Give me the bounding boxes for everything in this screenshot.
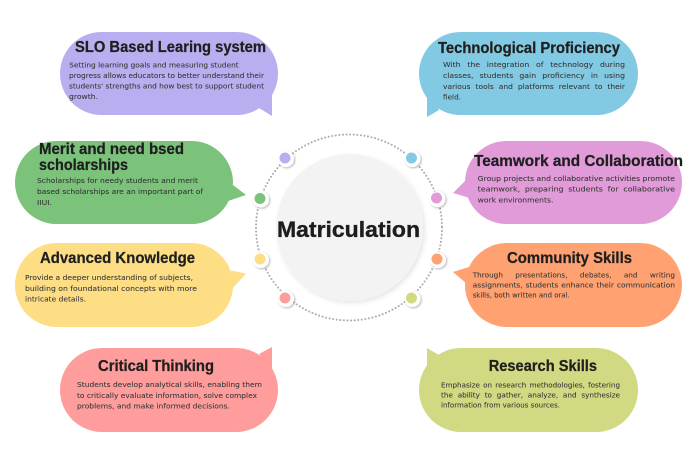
body text: Students develop analytical skills, enabling them: [77, 380, 262, 389]
speech bubble: [60, 32, 278, 116]
node: orange: [430, 252, 446, 268]
node: yellow: [253, 252, 269, 268]
heading: Teamwork and Collaboration: [474, 153, 683, 170]
body text: [472, 271, 675, 300]
body text: assignments, students enhance their communication: [473, 281, 675, 290]
body text: [478, 174, 676, 204]
speech bubble: [453, 243, 682, 327]
body text: [69, 60, 264, 101]
center title: Matriculation: [277, 217, 420, 242]
body text: Group projects and collaborative activities promote: [478, 174, 676, 183]
body text: [37, 176, 204, 207]
node: blue: [404, 151, 420, 167]
node: orchid: [430, 191, 446, 207]
body text: IIUI.: [37, 198, 52, 207]
body text: Scholarships for needy students and merit: [37, 176, 198, 185]
heading: Advanced Knowledge: [40, 250, 195, 267]
speech bubble: [15, 243, 246, 327]
body text: [77, 380, 262, 410]
panel: Merit and need bsed scholarships: [15, 141, 246, 224]
speech bubble: [15, 141, 246, 224]
heading: SLO Based Learing system: [75, 39, 266, 56]
center circle: [276, 154, 423, 301]
heading: Merit and need bsed: [39, 141, 184, 158]
heading: Critical Thinking: [98, 358, 214, 375]
panel: SLO Based Learing system: [60, 32, 278, 116]
body text: Provide a deeper understanding of subjects,: [25, 273, 193, 282]
body text: intricate details.: [25, 294, 86, 304]
body text: problems, and make informed decisions.: [77, 402, 230, 410]
body text: [25, 273, 198, 304]
body text: skills, both written and oral.: [473, 291, 570, 300]
body text: [443, 60, 625, 102]
heading: Technological Proficiency: [438, 40, 620, 57]
body text: [441, 380, 620, 409]
body text: Through presentations, debates, and writing: [472, 271, 675, 280]
panel: Advanced Knowledge: [15, 243, 246, 327]
panel: Research Skills: [419, 348, 638, 432]
body text: progress allows educators to better understand their: [69, 71, 264, 80]
speech bubble: [419, 32, 638, 117]
body text: building on foundational concepts with more: [25, 284, 198, 293]
node: green: [253, 192, 269, 208]
body text: classes, students gain proficiency in using: [443, 71, 625, 80]
body text: information from various sources.: [441, 400, 560, 409]
body text: based scholarships are an important part of: [37, 187, 203, 196]
node: lime: [404, 291, 420, 307]
body text: Emphasize on research methodologies, fostering: [441, 380, 620, 389]
body text: Setting learning goals and measuring student: [69, 60, 239, 70]
body text: various tools and platforms relevant to their: [443, 82, 625, 91]
panel: Teamwork and Collaboration: [453, 141, 683, 224]
body text: field.: [443, 92, 461, 102]
node: purple: [278, 151, 294, 167]
body text: growth.: [69, 92, 98, 101]
speech bubble: [419, 348, 638, 432]
body text: the ability to gather, analyze, and synthesize: [441, 390, 620, 399]
speech bubble: [60, 347, 278, 432]
heading: Research Skills: [489, 358, 597, 375]
heading: [39, 141, 184, 174]
body text: students' strengths and how best to support student: [69, 82, 264, 90]
node: pink: [278, 291, 294, 307]
heading: scholarships: [39, 157, 128, 174]
body text: With the integration of technology during: [443, 60, 625, 69]
panel: Technological Proficiency: [419, 32, 638, 117]
speech bubble: [453, 141, 682, 224]
panel: Critical Thinking: [60, 347, 278, 432]
body text: teamwork, preparing students for collaborative: [478, 185, 676, 194]
panel: Community Skills: [453, 243, 682, 327]
body text: to critically evaluate information, solve complex: [77, 391, 258, 400]
body text: work environments.: [478, 195, 553, 204]
heading: Community Skills: [507, 250, 632, 267]
